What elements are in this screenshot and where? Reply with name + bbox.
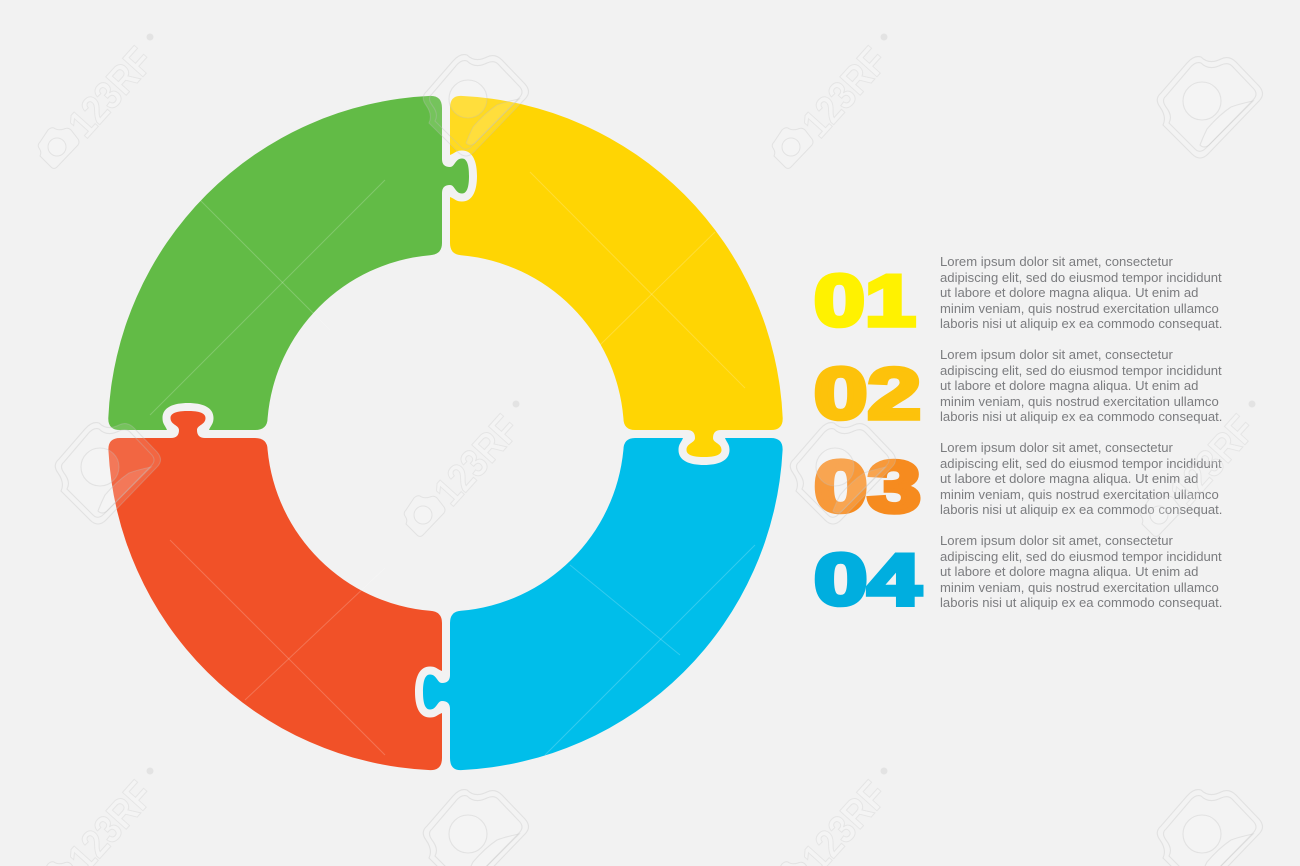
- text block 01: ut labore et dolore magna aliqua. Ut enim ad: [940, 285, 1198, 300]
- logo watermark center: [404, 400, 528, 536]
- text block 01: Lorem ipsum dolor sit amet, consectetur: [940, 254, 1173, 269]
- text block 01: minim veniam, quis nostrud exercitation ullamco: [940, 301, 1219, 316]
- text block 03: ut labore et dolore magna aliqua. Ut enim ad: [940, 471, 1198, 486]
- text block 01: laboris nisi ut aliquip ex ea commodo consequat.: [940, 316, 1222, 331]
- text block 04: laboris nisi ut aliquip ex ea commodo consequat.: [940, 595, 1222, 610]
- text block 02: [940, 347, 1222, 424]
- text block 03: Lorem ipsum dolor sit amet, consectetur: [940, 440, 1173, 455]
- text block 03: adipiscing elit, sed do eiusmod tempor incididunt: [940, 456, 1222, 471]
- puzzle piece: blue: [423, 438, 783, 770]
- text block 01: adipiscing elit, sed do eiusmod tempor incididunt: [940, 270, 1222, 285]
- number 04: 04: [814, 539, 921, 620]
- logo watermark top middle: [772, 34, 896, 168]
- text block 02: Lorem ipsum dolor sit amet, consectetur: [940, 347, 1173, 362]
- text block 01: [940, 254, 1222, 331]
- logo watermark top middle: 123RF: [794, 39, 896, 146]
- number 02: 02: [814, 353, 921, 434]
- text block 02: adipiscing elit, sed do eiusmod tempor incididunt: [940, 363, 1222, 378]
- text block 02: ut labore et dolore magna aliqua. Ut enim ad: [940, 378, 1198, 393]
- text block 04: adipiscing elit, sed do eiusmod tempor incididunt: [940, 549, 1222, 564]
- text block 03: [940, 440, 1222, 517]
- logo watermark top left: [38, 34, 162, 168]
- text block 04: Lorem ipsum dolor sit amet, consectetur: [940, 533, 1173, 548]
- number 01: 01: [814, 262, 916, 341]
- logo watermark center: 123RF: [426, 407, 528, 514]
- text block 02: minim veniam, quis nostrud exercitation ullamco: [940, 394, 1219, 409]
- text block 03: minim veniam, quis nostrud exercitation ullamco: [940, 487, 1219, 502]
- text block 02: laboris nisi ut aliquip ex ea commodo consequat.: [940, 409, 1222, 424]
- puzzle piece: yellow: [450, 96, 783, 457]
- logo watermark right: 123RF: [1162, 407, 1264, 514]
- text block 04: minim veniam, quis nostrud exercitation ullamco: [940, 580, 1219, 595]
- number 03: 03: [814, 446, 921, 527]
- text block 04: [940, 533, 1222, 610]
- text block 04: ut labore et dolore magna aliqua. Ut enim ad: [940, 564, 1198, 579]
- faint diagonal watermark lines: [150, 172, 755, 755]
- puzzle piece: red: [108, 411, 442, 770]
- text block 03: laboris nisi ut aliquip ex ea commodo consequat.: [940, 502, 1222, 517]
- logo watermark right: [1140, 400, 1264, 536]
- logo watermark top left: 123RF: [60, 39, 162, 146]
- puzzle piece: green: [108, 96, 469, 430]
